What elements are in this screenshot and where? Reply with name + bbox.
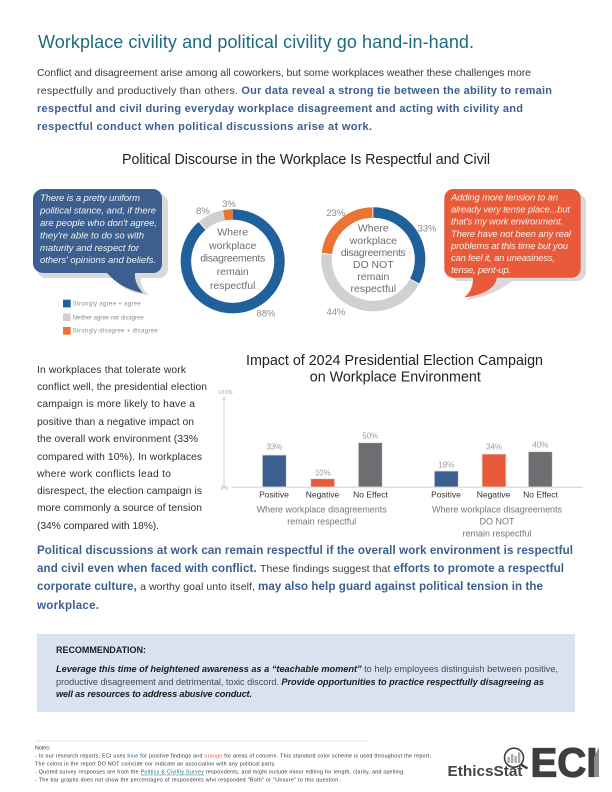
donut chart: disagreements remain respectful: respectful [210, 280, 255, 292]
heading: impact chart: on Workplace Environment [310, 370, 481, 386]
panel: recommendation: well as resources to address abusive conduct. [56, 689, 252, 699]
footnotes: - The bar graphs does not show the percentages of respondents who responded "Both" or "Unsure" to this question. [35, 778, 340, 784]
callout: left quote: others' opinions and beliefs. [40, 255, 156, 266]
bar chart: 33% [266, 443, 282, 452]
left text block: election impact: more commonly a source of tension [37, 503, 202, 514]
bar chart: No Effect [523, 490, 559, 500]
findings paragraph: and civil even when faced with conflict. These findings suggest that efforts to promote a respectful [37, 562, 564, 575]
title: Workplace civility and political civility go hand-in-hand. [38, 32, 474, 52]
bar chart: Positive [259, 490, 289, 500]
callout: right quote: Adding more tension to an [450, 193, 558, 204]
donut chart: disagreements remain respectful: Where [217, 227, 248, 239]
donut chart: disagreements do not remain respectful [326, 208, 437, 318]
donut chart: disagreements do not remain respectful: 44% [326, 307, 346, 318]
left text block: election impact: the overall work environment (33% [37, 434, 198, 445]
callout: right quote: tense, pent-up. [451, 265, 511, 276]
footnotes: - Quoted survey responses are from the Politics & Civility Survey respondents, and might include minor editing for length, clarity, and spelling. [35, 770, 405, 776]
callout: left quote: are people who don't agree, [40, 218, 157, 229]
callout: left quote: they're able to do so with [40, 230, 144, 242]
donut chart: disagreements remain respectful: 88% [256, 309, 276, 320]
logo: EthicsStat [448, 748, 528, 780]
legend: Strongly agree + agree [73, 302, 141, 308]
panel: recommendation: Leverage this time of heightened awareness as a “teachable moment” to help employees distinguish between positive, [56, 664, 558, 674]
bar chart: Negative [306, 490, 340, 500]
callout: right quote: that's my work environment. [451, 217, 563, 228]
bar chart: 50% [362, 431, 378, 440]
intro paragraph: respectful conduct when political discussions arise at work. [37, 121, 372, 133]
left text block: election impact: In workplaces that tolerate work [37, 365, 187, 376]
bar chart: 100% [218, 390, 233, 396]
legend: Neither agree nor disagree [73, 315, 144, 321]
left text block: election impact: campaign is more likely to have a [37, 399, 195, 410]
callout: left quote [33, 189, 168, 295]
callout: left quote: maturity and respect for [40, 243, 140, 254]
donut chart: disagreements do not remain respectful: Where [358, 223, 389, 235]
left text block: election impact: conflict well, the presidential election [37, 382, 207, 393]
bar chart: 40% [532, 440, 548, 449]
donut chart: disagreements remain respectful: 3% [222, 199, 236, 210]
intro paragraph: respectfully and productively than others. Our data reveal a strong tie between the ability to remain [37, 85, 552, 97]
footnotes: Notes: [35, 746, 50, 752]
bar chart: remain respectful [287, 517, 356, 527]
panel: recommendation [37, 634, 575, 712]
left text block: election impact [36, 365, 207, 532]
intro paragraph: Conflict and disagreement arise among all coworkers, but some workplaces weather these challenges more [37, 67, 531, 79]
intro paragraph [37, 67, 552, 133]
findings paragraph: workplace. [36, 599, 99, 612]
donut chart: disagreements remain respectful: disagreements [200, 253, 265, 265]
heading: political discourse: Political Discourse in the Workplace Is Respectful and Civil [122, 152, 490, 168]
footnotes: - In our research reports, ECI uses blue for positive findings and orange for areas of concern. This standard color scheme is used throughout the report. [35, 754, 431, 760]
bar chart: Where workplace disagreements [432, 505, 562, 515]
left text block: election impact: disrespect, the election campaign is [37, 486, 202, 497]
heading: impact chart [246, 353, 543, 386]
bar chart: Negative [477, 490, 511, 500]
bar chart: Where workplace disagreements [257, 505, 387, 515]
footnotes [35, 741, 431, 784]
donut chart: disagreements remain respectful [186, 199, 280, 320]
donut chart: disagreements remain respectful: remain [217, 266, 249, 278]
callout: right quote [444, 189, 586, 300]
footnotes: The colors in the report DO NOT coincide nor indicate an association with any political party. [35, 762, 276, 768]
donut chart: disagreements do not remain respectful: respectful [351, 283, 396, 295]
panel: recommendation: RECOMMENDATION: [56, 645, 146, 655]
donut chart: disagreements do not remain respectful: 23% [326, 208, 346, 219]
callout: right quote: already very tense place...but [451, 205, 570, 216]
callout: left quote: There is a pretty uniform [40, 193, 140, 204]
logo: EthicsStat: EthicsStat [448, 764, 523, 780]
donut chart: disagreements do not remain respectful: disagreements [341, 247, 406, 259]
panel: recommendation: productive disagreement and detrimental, toxic discord. Provide opportunities to practice respectfully disagreeing as [56, 677, 544, 687]
left text block: election impact: where work conflicts lead to [36, 469, 171, 480]
bar chart: DO NOT [480, 517, 515, 527]
callout: right quote: problems at this time but you [450, 241, 569, 252]
left text block: election impact: (34% compared with 18%). [37, 521, 159, 532]
bar chart: remain respectful [462, 529, 532, 539]
heading: impact chart: Impact of 2024 Presidential Election Campaign [246, 353, 543, 369]
donut chart: disagreements do not remain respectful: remain [357, 271, 390, 283]
bar chart [218, 390, 583, 539]
intro paragraph: respectful and civil during everyday workplace disagreement and acting with civility and [37, 103, 523, 115]
left text block: election impact: positive than a negative impact on [37, 417, 194, 428]
donut chart: disagreements remain respectful: workplace [208, 240, 256, 252]
bar chart: 0% [221, 486, 228, 492]
callout: right quote: There have not been any real [451, 229, 572, 240]
findings paragraph [36, 544, 573, 612]
callout: left quote: political stance, and, if there [39, 206, 156, 216]
legend [63, 300, 158, 335]
donut chart: disagreements do not remain respectful: 33% [417, 224, 437, 235]
left text block: election impact: compared with 10%). In workplaces [37, 452, 202, 463]
donut chart: disagreements do not remain respectful: workplace [349, 235, 397, 247]
findings paragraph: corporate culture, a worthy goal unto itself, may also help guard against political tension in the [37, 580, 544, 593]
donut chart: disagreements do not remain respectful: DO NOT [353, 259, 394, 271]
legend: Strongly disagree + disagree [73, 329, 158, 335]
bar chart: 10% [315, 469, 331, 478]
bar chart: Positive [431, 490, 461, 500]
logo: ECI: ECI [530, 739, 598, 785]
bar chart: 18% [438, 461, 454, 470]
bar chart: 34% [486, 443, 502, 452]
bar chart: No Effect [353, 490, 389, 500]
findings paragraph: Political discussions at work can remain respectful if the overall work environment is respectful [37, 544, 573, 557]
callout: right quote: can feel it, an uneasiness, [451, 253, 555, 264]
donut chart: disagreements remain respectful: 8% [196, 206, 210, 217]
